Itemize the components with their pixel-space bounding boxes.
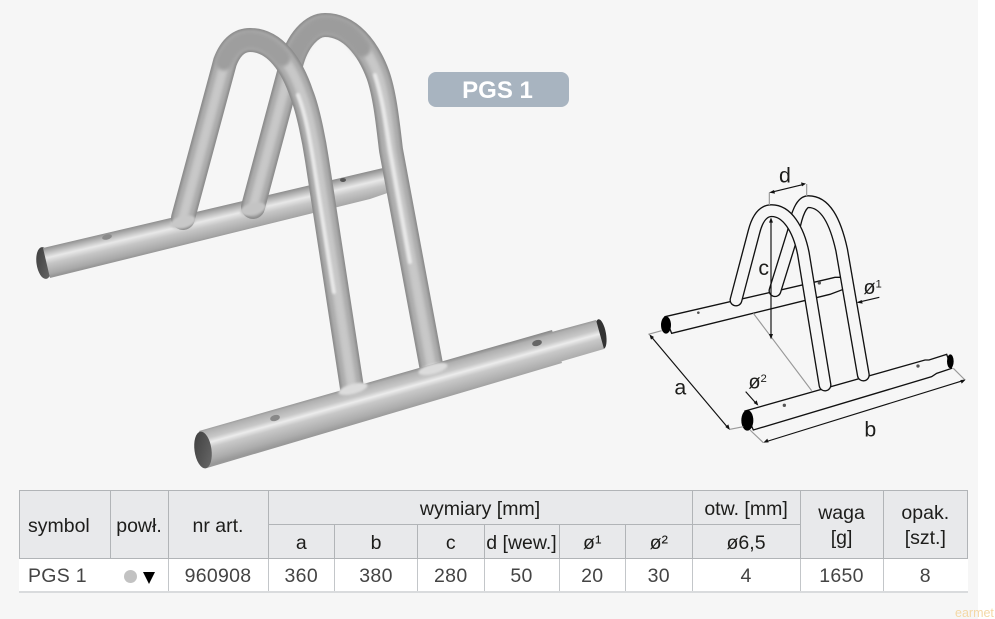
- table data row: 360: [285, 565, 318, 587]
- dimension labels: ø: [863, 277, 876, 299]
- table header row 2: b: [371, 532, 381, 554]
- back hoop: [239, 25, 432, 370]
- table header row 1: symbol: [28, 514, 90, 536]
- table header row 1: [szt.]: [905, 527, 946, 549]
- front tube outline: [741, 354, 954, 431]
- table header row 1: [g]: [831, 527, 852, 549]
- table header row 2: d [wew.]: [486, 532, 557, 554]
- dimension labels: [674, 164, 882, 442]
- dimension labels: d: [779, 164, 791, 188]
- dimension labels: 1: [876, 278, 882, 290]
- product name badge: PGS 1: [462, 77, 533, 104]
- product name badge: [428, 72, 569, 106]
- table data row: 8: [920, 565, 931, 587]
- table data row: 960908: [185, 565, 251, 587]
- table data row: 280: [434, 565, 467, 587]
- front hoop: [169, 40, 352, 388]
- table header row 1: powł.: [116, 514, 162, 536]
- table data row: 4: [740, 565, 752, 587]
- lower front tube: [192, 318, 609, 470]
- table header row 1: opak.: [901, 502, 949, 524]
- table data row: [20, 559, 967, 591]
- table header row 1: wymiary [mm]: [420, 498, 540, 520]
- specification table: [19, 490, 968, 593]
- rear tube outline: [661, 277, 843, 334]
- dimension labels: ø: [748, 372, 761, 394]
- table header row 1: nr art.: [193, 514, 243, 536]
- table data row: 1650: [819, 565, 864, 587]
- dimension labels: a: [674, 376, 686, 400]
- table header row 2: ø¹: [583, 532, 601, 554]
- product photo: bicycle rack: [34, 25, 609, 470]
- back hoop outline: [775, 202, 863, 375]
- table header row 2: [269, 525, 800, 558]
- dimension lines: [648, 182, 966, 443]
- dimension labels: 2: [761, 373, 767, 385]
- table header row 2: ø²: [650, 532, 668, 554]
- table header row 2: ø6,5: [727, 532, 766, 554]
- table header row 1: [20, 491, 967, 591]
- front hoop outline: [736, 211, 825, 385]
- table data row: 30: [648, 565, 670, 587]
- table data row: 50: [510, 565, 533, 587]
- table header row 1: otw. [mm]: [704, 498, 788, 520]
- table header row 2: a: [296, 532, 307, 554]
- technical dimension drawing: [648, 164, 966, 443]
- dimension labels: b: [864, 418, 876, 442]
- table header row 2: c: [446, 532, 456, 554]
- table data row: PGS 1: [28, 565, 87, 587]
- table data row: 20: [581, 565, 603, 587]
- table data row: 380: [359, 565, 393, 587]
- upper rear tube: [34, 166, 396, 280]
- table header row 1: waga: [818, 502, 865, 524]
- dimension labels: c: [758, 256, 769, 280]
